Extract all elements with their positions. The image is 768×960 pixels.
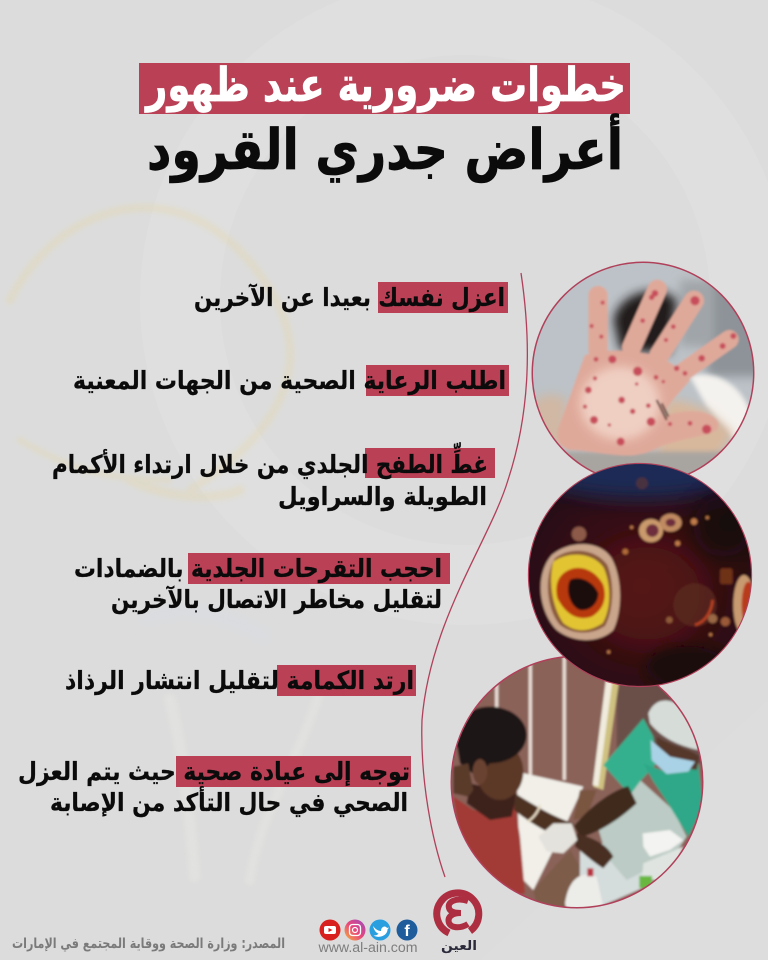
- icon: twitter: [370, 920, 390, 940]
- step 3: غطِّ الطفح الجلدي من خلال ارتداء الأكمام: [52, 442, 488, 480]
- icon: youtube: [320, 920, 340, 940]
- icon: facebook: f: [404, 923, 410, 940]
- step 4: [74, 553, 450, 615]
- source note: المصدر: وزارة الصحة ووقاية المجتمع في الإمارات: [12, 936, 285, 952]
- icon: instagram: [344, 920, 366, 940]
- step 3: الطويلة والسراويل: [278, 482, 487, 512]
- social icons and website: [317, 920, 418, 955]
- step 6: الصحي في حال التأكد من الإصابة: [50, 786, 408, 818]
- step 6: توجه إلى عيادة صحية حيث يتم العزل: [18, 757, 410, 787]
- nurse: [603, 718, 657, 795]
- child: [453, 793, 525, 897]
- small virus particles: [639, 519, 663, 542]
- step 4: لتقليل مخاطر الاتصال بالآخرين: [111, 585, 442, 615]
- curved divider line: [422, 273, 527, 877]
- logo: Al-Ain: العين: [441, 939, 477, 954]
- large virus: [541, 544, 620, 640]
- website: www.al-ain.com: [317, 940, 418, 955]
- step 3: [52, 442, 495, 512]
- step 2: اطلب الرعاية الصحية من الجهات المعنية: [73, 366, 506, 396]
- photo: hand with rash: [532, 262, 754, 474]
- hand shape: [557, 286, 729, 456]
- title: highlighted heading line: خطوات ضرورية عند ظهور: [144, 58, 626, 113]
- step 1: اعزل نفسك بعيدا عن الآخرين: [194, 283, 505, 313]
- step 6: [18, 756, 411, 818]
- step 4: احجب التقرحات الجلدية بالضمادات: [74, 554, 442, 584]
- logo: Al-Ain: [437, 893, 479, 954]
- photo: child and health worker: [450, 656, 704, 908]
- step 5: ارتد الكمامة لتقليل انتشار الرذاذ: [65, 666, 414, 696]
- photo: monkeypox virus particles: [527, 447, 757, 687]
- title: second heading line: أعراض جدري القرود: [147, 113, 623, 183]
